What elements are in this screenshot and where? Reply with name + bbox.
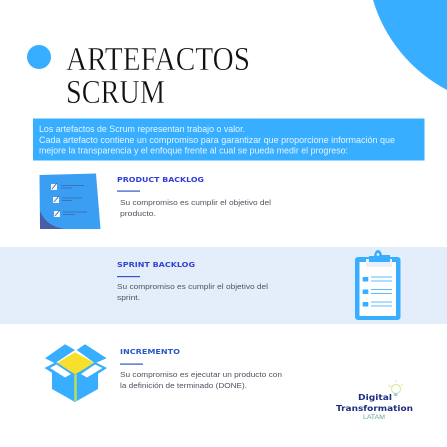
title	[66, 41, 250, 111]
logo: Digital Transformation LATAM: LATAM	[363, 415, 385, 421]
heading: sprint backlog: SPRINT BACKLOG	[117, 260, 195, 269]
text: sprint backlog	[117, 282, 268, 302]
title: ARTEFACTOS	[66, 41, 250, 78]
text: product backlog: producto.	[120, 209, 156, 218]
panel: sprint backlog	[0, 247, 447, 324]
title bullet circle	[27, 45, 51, 69]
underline: sprint backlog	[117, 276, 140, 277]
corner decoration: blue arc	[373, 0, 447, 90]
text: incremento: Su compromiso es ejecutar un producto con	[120, 370, 282, 379]
icon: clipboard	[355, 250, 400, 320]
panel: product backlog	[40, 174, 271, 229]
underline: product backlog	[117, 190, 140, 192]
intro banner: Cada artefacto contiene un compromiso para garantizar que proporcione información que	[39, 135, 395, 145]
text: incremento: la definición de terminado (DONE).	[120, 381, 247, 390]
heading: product backlog: PRODUCT BACKLOG	[117, 175, 204, 184]
text: product backlog: Su compromiso es cumplir el objetivo del	[120, 198, 271, 207]
intro banner: Los artefactos de Scrum representan trabajo o valor.	[39, 124, 245, 134]
logo: Digital Transformation LATAM: Transformation	[336, 404, 413, 413]
intro banner	[33, 118, 424, 160]
icon: open box	[44, 344, 107, 402]
panel: incremento	[44, 344, 282, 402]
text: sprint backlog: sprint.	[117, 293, 140, 302]
logo: Digital Transformation LATAM	[336, 380, 413, 421]
icon: sticky note checklist	[40, 174, 100, 229]
intro banner: mejore la transparencia y el enfoque frente al cual se pueda medir el progreso:	[39, 146, 348, 156]
text: incremento	[120, 370, 282, 390]
title: SCRUM	[66, 74, 165, 111]
text: sprint backlog: Su compromiso es cumplir el objetivo del	[117, 282, 268, 291]
logo: Digital Transformation LATAM: Digital	[358, 393, 392, 402]
underline: incremento	[120, 364, 143, 365]
icon: light bulb	[388, 380, 403, 396]
heading: incremento: INCREMENTO	[120, 347, 180, 356]
text: product backlog	[120, 198, 271, 218]
